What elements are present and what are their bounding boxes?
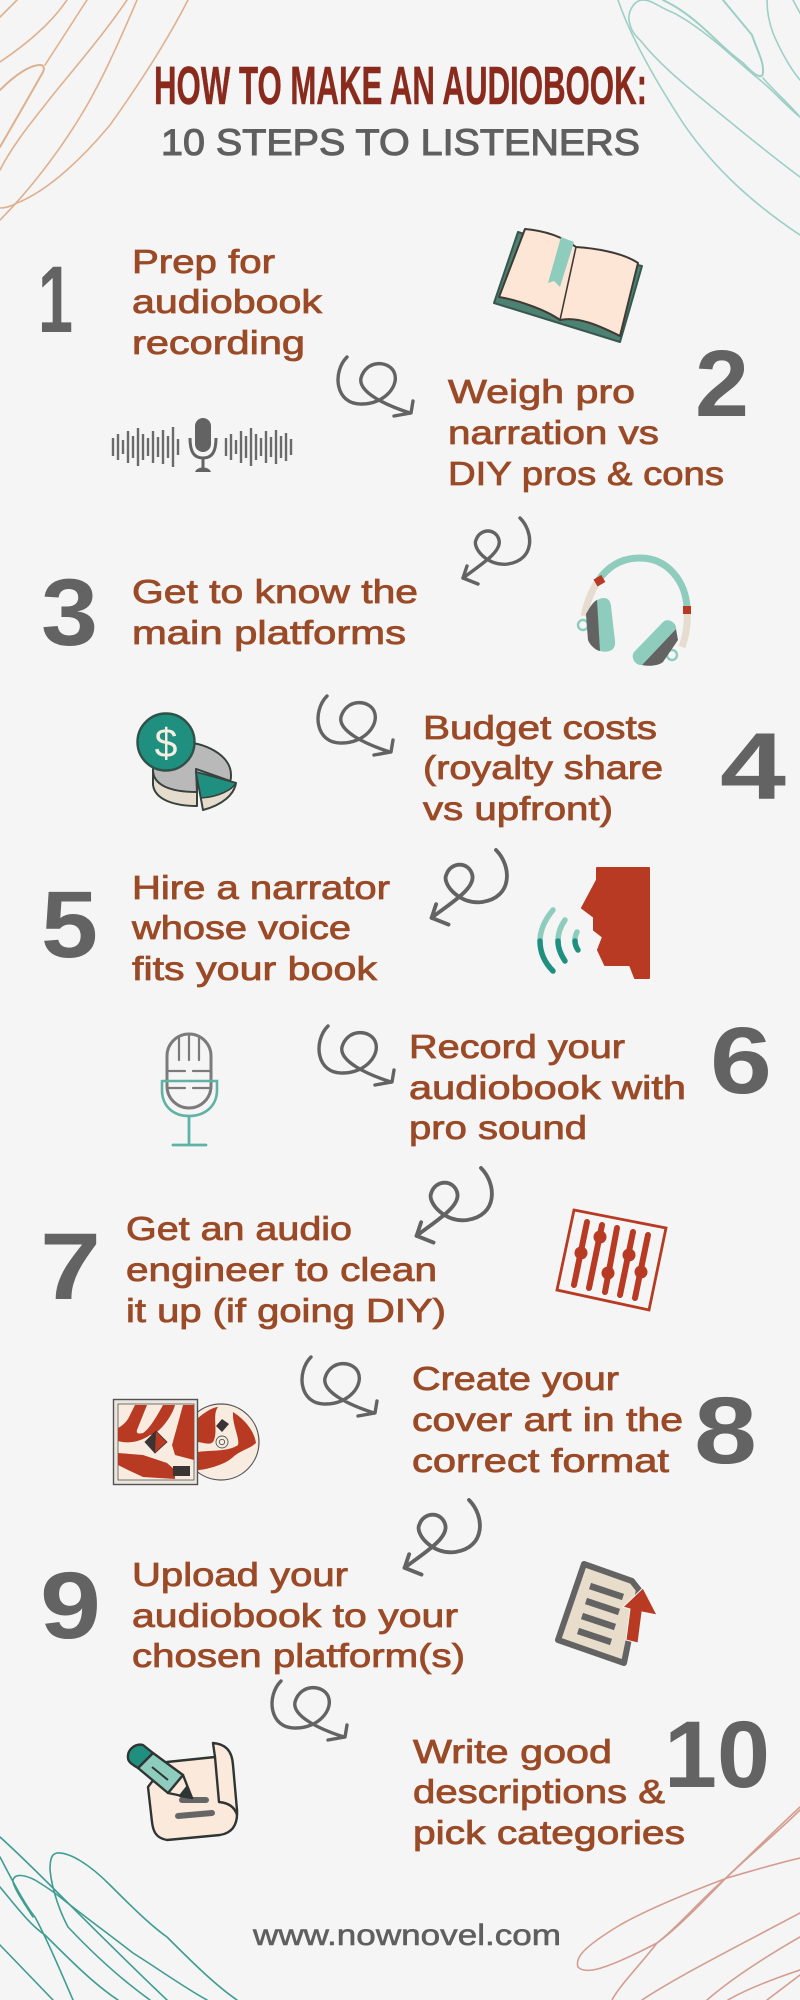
step 10 number: 10 bbox=[664, 1702, 770, 1808]
step 10 text: pick categories bbox=[413, 1814, 685, 1851]
step 8 text bbox=[412, 1360, 683, 1479]
icon: studio microphone bbox=[162, 1034, 217, 1145]
footer url: www.nownovel.com bbox=[252, 1919, 561, 1952]
step 8 number: 8 bbox=[694, 1378, 757, 1484]
step 2 number: 2 bbox=[695, 331, 749, 437]
arrow 2 to 3 bbox=[463, 518, 530, 584]
step 7 text: it up (if going DIY) bbox=[126, 1292, 446, 1329]
arrow 6 to 7 bbox=[417, 1168, 492, 1243]
step 6 number: 6 bbox=[710, 1008, 772, 1114]
icon: cover art and disc bbox=[114, 1400, 259, 1484]
step 7 number: 7 bbox=[40, 1214, 101, 1320]
icon: waveform microphone bbox=[113, 418, 291, 472]
step 5 text: whose voice bbox=[131, 909, 351, 946]
step 2 text: Weigh pro bbox=[448, 373, 635, 410]
arrow 1 to 2 bbox=[338, 357, 413, 416]
step 2 text: DIY pros & cons bbox=[448, 455, 724, 492]
icon: mixer sliders bbox=[557, 1210, 666, 1310]
icon: headphones bbox=[578, 558, 691, 666]
step 6 text: Record your bbox=[409, 1028, 625, 1065]
step 6 text bbox=[409, 1028, 686, 1146]
step 3 text bbox=[132, 573, 418, 651]
step 4 text: vs upfront) bbox=[423, 790, 613, 827]
step 10 text bbox=[413, 1733, 685, 1851]
step 1 text: audiobook bbox=[132, 283, 323, 320]
icon: speaking face with sound waves bbox=[540, 868, 649, 978]
step 6 text: audiobook with bbox=[409, 1069, 686, 1106]
icon: document with upload arrow bbox=[558, 1564, 657, 1663]
step 8 text: cover art in the bbox=[412, 1401, 683, 1438]
step 3 text: main platforms bbox=[132, 614, 406, 651]
icon: pencil writing on scroll bbox=[128, 1743, 237, 1840]
step 5 text: fits your book bbox=[132, 950, 378, 987]
step 9 text bbox=[132, 1556, 465, 1674]
step 9 number: 9 bbox=[40, 1553, 101, 1659]
arrow 9 to 10 bbox=[272, 1681, 347, 1740]
step 10 text: Write good bbox=[413, 1733, 612, 1770]
step 9 text: audiobook to your bbox=[132, 1597, 458, 1634]
step 7 text: Get an audio bbox=[126, 1210, 352, 1247]
arrow 4 to 5 bbox=[432, 850, 507, 925]
step 2 text bbox=[448, 373, 724, 492]
step 6 text: pro sound bbox=[409, 1109, 587, 1146]
icon: open book bbox=[494, 229, 642, 342]
step 7 text: engineer to clean bbox=[126, 1251, 437, 1288]
step 4 text: Budget costs bbox=[423, 709, 657, 746]
step 10 text: descriptions & bbox=[413, 1773, 665, 1810]
step 1 text: recording bbox=[132, 324, 305, 361]
step 1 text bbox=[132, 243, 323, 361]
step 2 text: narration vs bbox=[448, 414, 659, 451]
arrow 5 to 6 bbox=[319, 1026, 394, 1085]
step 9 text: chosen platform(s) bbox=[132, 1637, 465, 1674]
arrow 7 to 8 bbox=[302, 1357, 377, 1416]
icon: coin and pie chart: $ bbox=[155, 720, 178, 766]
arrow 3 to 4 bbox=[318, 696, 393, 755]
step 4 number: 4 bbox=[720, 714, 786, 820]
arrow 8 to 9 bbox=[405, 1500, 480, 1575]
step 7 text bbox=[126, 1210, 446, 1329]
step 8 text: Create your bbox=[412, 1360, 619, 1397]
step 3 number: 3 bbox=[41, 560, 98, 666]
step 4 text bbox=[423, 709, 663, 827]
step 5 text: Hire a narrator bbox=[132, 869, 390, 906]
step 1 number: 1 bbox=[38, 247, 73, 353]
step 5 number: 5 bbox=[41, 872, 98, 978]
icon: coin and pie chart bbox=[138, 714, 236, 810]
step 3 text: Get to know the bbox=[132, 573, 418, 610]
step 1 text: Prep for bbox=[132, 243, 275, 280]
step 8 text: correct format bbox=[412, 1442, 669, 1479]
subtitle: 10 STEPS TO LISTENERS bbox=[161, 122, 640, 163]
step 4 text: (royalty share bbox=[423, 749, 663, 786]
step 5 text bbox=[131, 869, 390, 987]
step 9 text: Upload your bbox=[132, 1556, 348, 1593]
